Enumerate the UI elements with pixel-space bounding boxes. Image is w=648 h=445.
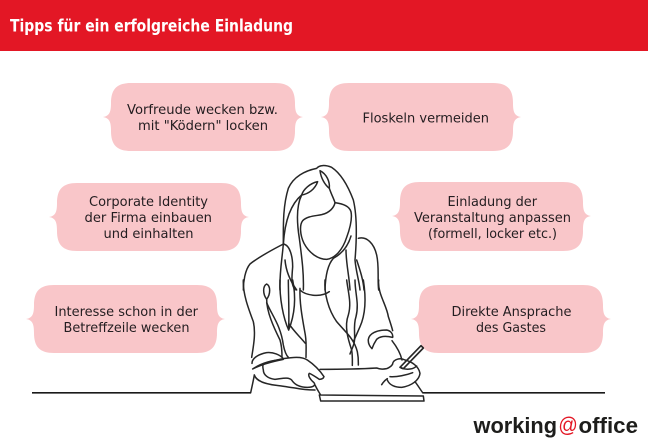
callout: Corporate Identity	[49, 183, 249, 251]
logo: working@office: working	[473, 413, 557, 438]
title: Tipps für ein erfolgreiche Einladung	[10, 16, 293, 36]
callout: Einladung anpassen: Veranstaltung anpassen	[414, 210, 571, 226]
callout: Interesse Betreffzeile	[26, 285, 225, 353]
callout: Einladung anpassen: Einladung der	[448, 194, 537, 210]
line drawing: woman writing at desk	[32, 166, 605, 401]
logo: working@office: @	[558, 414, 578, 437]
callout: Direkte Ansprache: des Gastes	[476, 320, 546, 336]
callout: Corporate Identity: der Firma einbauen	[84, 210, 212, 226]
callout: Corporate Identity: Corporate Identity	[89, 194, 208, 210]
callout: Interesse Betreffzeile: Interesse schon in der	[54, 304, 198, 320]
callout: Floskeln vermeiden	[321, 83, 521, 151]
callout: Interesse Betreffzeile: Betreffzeile wecken	[64, 320, 190, 336]
logo: working@office	[473, 413, 638, 438]
callout: Direkte Ansprache	[411, 285, 611, 353]
header band	[0, 0, 648, 51]
callout: Floskeln vermeiden: Floskeln vermeiden	[362, 110, 489, 126]
callout: Vorfreude wecken: mit "Ködern" locken	[138, 118, 268, 134]
desk line	[32, 392, 605, 394]
callout: Vorfreude wecken: Vorfreude wecken bzw.	[127, 102, 278, 118]
callout: Einladung anpassen	[392, 182, 591, 251]
logo: working@office: office	[578, 413, 638, 438]
callout: Einladung anpassen: (formell, locker etc.)	[428, 226, 557, 242]
callout: Direkte Ansprache: Direkte Ansprache	[452, 304, 572, 320]
callout: Vorfreude wecken	[103, 83, 303, 151]
callout: Corporate Identity: und einhalten	[104, 226, 194, 242]
